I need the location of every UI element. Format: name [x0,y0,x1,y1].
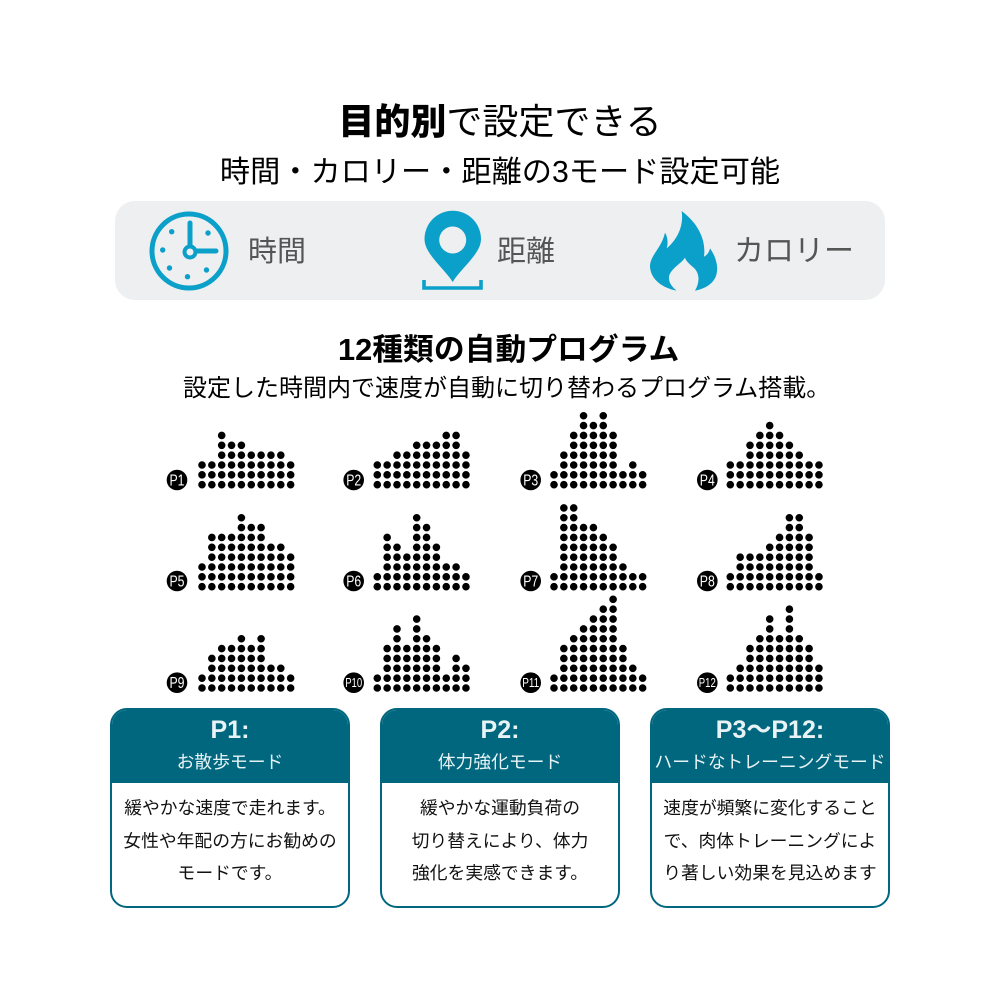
chart: P4 [697,425,819,490]
card header: P3-P12 [650,708,890,783]
card header: P2 [380,708,620,783]
card body: P1: 女性や年配の方にお勧めの [123,831,337,851]
label: distance: 距離 [497,236,555,268]
card body: P1: 緩やかな速度で走れます。 [124,798,336,818]
chart: P12 [697,608,819,693]
card body: P3-P12: 速度が頻繁に変化すること [663,798,877,818]
chart: P11: P11 [522,675,539,690]
chart: P7: P7 [523,574,538,590]
chart: P4: P4 [700,472,715,490]
card: P3-P12 [650,708,890,908]
chart: P6: P6 [346,574,361,590]
chart: P8: P8 [700,574,715,590]
chart: P10: P10 [345,675,362,690]
subtitle: 時間・カロリー・距離の3モード設定可能 [220,156,780,189]
chart: P5 [167,517,291,591]
card header: P1: お散歩モード [177,752,283,772]
card body: P3-P12: り著しい効果を見込めます [663,863,877,883]
icon: flame [650,211,717,291]
panel: mode icons [115,201,885,300]
card body: P2 [412,798,588,883]
chart: P9 [167,638,291,693]
chart: P1 [167,434,291,490]
chart: P3 [520,415,643,490]
chart: P9: P9 [170,675,185,692]
card: P1 [110,708,350,908]
card body: P1: モードです。 [178,863,282,883]
icon: clock [152,214,226,288]
chart: P11 [520,598,643,693]
card header: P1: P1: [211,716,249,744]
chart: P8 [697,517,819,591]
card header: P3-P12: P3～P12: [716,716,824,744]
card header: P1 [110,708,350,783]
card body: P2: 切り替えにより、体力 [412,831,588,851]
card body: P3-P12: で、肉体トレーニングによ [664,831,876,851]
card body: P2: 緩やかな運動負荷の [420,798,580,818]
chart: P12: P12 [699,675,716,690]
chart: P6 [343,517,466,591]
label: calories: カロリー [734,235,854,268]
title: 目的別で設定できる [338,101,662,142]
chart: P5: P5 [170,574,185,590]
section heading: 12種類の自動プログラム [338,332,679,367]
chart: P2 [343,434,466,490]
card body: P3-P12 [663,798,877,883]
card header: P2: 体力強化モード [438,752,562,772]
card: P2 [380,708,620,908]
card header: P3-P12: ハードなトレーニングモード [654,752,886,772]
card body: P2: 強化を実感できます。 [412,863,588,883]
label: time: 時間 [248,236,306,268]
icon: map pin [424,211,481,288]
section description: 設定した時間内で速度が自動に切り替わるプログラム搭載。 [183,375,830,402]
chart: P3: P3 [523,472,538,490]
chart: P2: P2 [346,472,361,490]
chart: P7 [520,507,643,591]
card header: P2: P2: [481,716,519,744]
card body: P1 [123,798,337,883]
chart: P10 [343,618,466,693]
chart: P1: P1 [170,472,185,490]
